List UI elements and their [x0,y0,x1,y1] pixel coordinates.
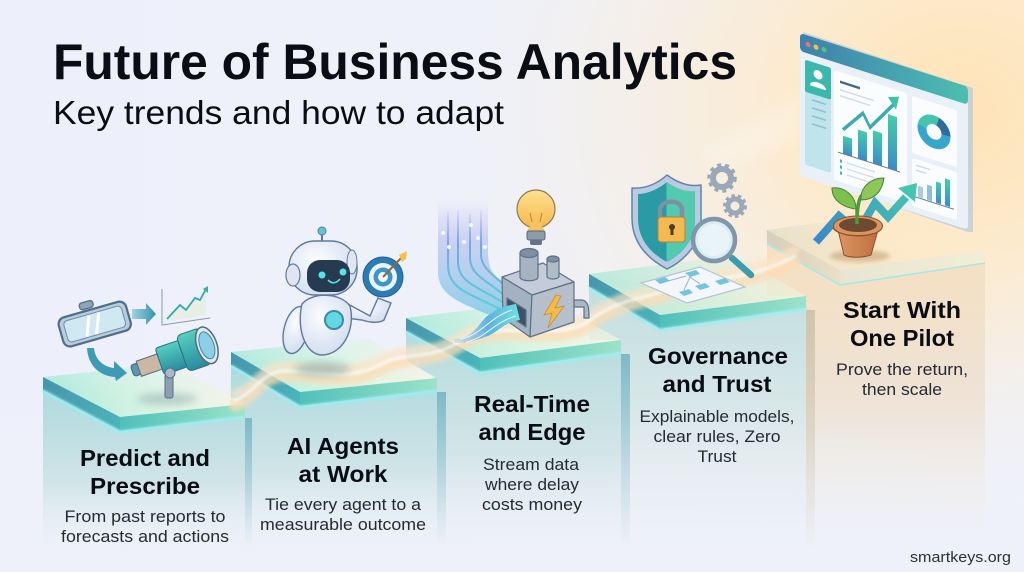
robot right ear [347,250,357,274]
step 4 platform [588,255,808,474]
text block: real-time and edge [474,391,590,514]
icon: small line chart [162,286,210,325]
text block: start with one pilot: Start With [843,297,961,323]
icon: machine [502,248,589,337]
icon: robot with target [279,227,407,376]
text block: predict and prescribe: forecasts and actions [61,528,229,546]
column separators [245,310,815,550]
text block: predict and prescribe [61,445,229,546]
icon: lightning bolt [544,295,564,328]
wavy orange ribbon [235,250,795,406]
icon: magnifier [693,219,751,275]
icon: growth arrow and sapling [816,178,917,262]
step 2 platform [230,338,438,514]
robot face [307,260,350,292]
icon: rear-view mirror [54,291,133,348]
icon: light bulb [517,190,555,245]
text block: governance and trust: Explainable models, [640,408,794,426]
text block: AI agents [260,433,426,534]
text block: start with one pilot [836,297,968,399]
text block: real-time and edge: Stream data [483,456,580,474]
icon: dashboard [800,32,973,232]
icon: flow chart sheet [641,267,745,303]
main chart panel [834,70,907,203]
text block: governance and trust: Governance [648,343,788,369]
subtitle: Key trends and how to adapt [53,94,504,131]
text block: real-time and edge: costs money [482,496,583,514]
text block: real-time and edge: and Edge [478,419,586,445]
text block: AI agents: Tie every agent to a [265,496,422,514]
robot left arm [279,304,313,356]
icon: shield [632,175,701,269]
step 1 platform [42,368,246,519]
robot ear [286,264,300,286]
robot right arm [346,298,391,322]
icon: target [363,251,407,297]
icon: data streams [438,200,505,322]
text block: governance and trust: Trust [698,448,737,466]
mini bar panel [912,158,957,220]
light beam [700,95,800,175]
text block: real-time and edge: Real-Time [474,391,590,417]
icon: outlet stream [455,304,520,343]
text block: governance and trust: and Trust [662,371,772,397]
icon: telescope [126,324,223,405]
text block: start with one pilot: One Pilot [850,325,954,351]
donut panel [912,96,957,167]
text block: start with one pilot: then scale [862,381,942,399]
text block: governance and trust: clear rules, Zero [654,428,780,446]
text block: real-time and edge: where delay [484,476,580,494]
icon: growth arrow [816,183,917,242]
text block: AI agents: AI Agents [287,433,399,459]
footer: source: smartkeys.org [910,549,1011,566]
icon: flower pot [833,210,882,257]
icon: padlock [658,202,685,242]
text block: governance and trust [640,343,794,466]
icon: data streams, machine and light bulb [438,190,589,343]
robot body [300,295,351,355]
step 5 platform [766,223,985,488]
icon: curved arrow [87,348,127,381]
robot head [289,241,357,295]
icon: arrow to chart [132,303,156,325]
robot antenna [318,227,326,244]
sidebar [805,60,831,173]
icon: shield, magnifier, gears and flow chart [632,165,751,303]
text block: predict and prescribe: Prescribe [90,473,200,499]
text block: AI agents: at Work [298,461,388,487]
icon: gears [709,165,746,216]
icon: rear-view mirror, chart and telescope [54,286,223,405]
text block: predict and prescribe: Predict and [80,445,210,471]
title: Future of Business Analytics [53,34,737,90]
dashboard window [800,33,968,230]
robot chest light [325,311,343,329]
icon: sapling leaves [832,178,884,224]
text block: predict and prescribe: From past reports to [64,508,226,526]
text block: AI agents: measurable outcome [260,516,426,534]
text block: start with one pilot: Prove the return, [836,361,968,379]
step 3 platform [404,309,622,504]
